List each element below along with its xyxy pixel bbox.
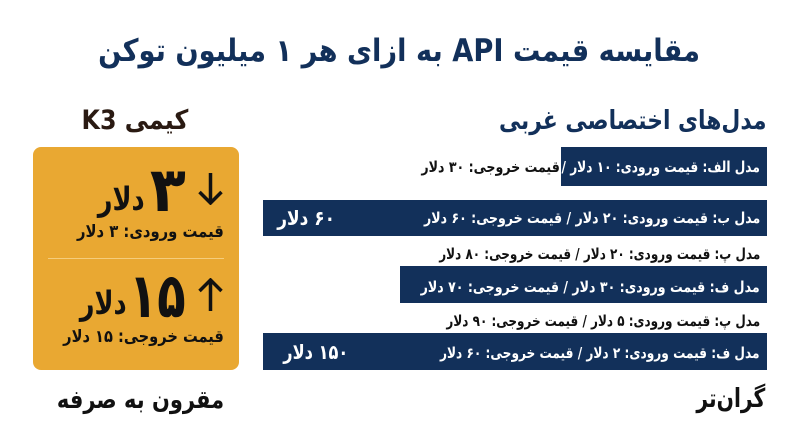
text: model F2: مدل ف: قیمت ورودی: ۲ دلار / قیمت خروجی: ۶۰ دلار — [440, 344, 760, 362]
text: model A off bar: قیمت خروجی: ۳۰ دلار — [422, 158, 560, 176]
icon: up arrow — [198, 278, 223, 311]
icon: down arrow — [198, 173, 223, 205]
bar: model F2 — [263, 333, 767, 370]
label: cost effective: مقرون به صرفه — [57, 385, 224, 414]
bar: model B — [263, 200, 767, 236]
value: model F2: ۱۵۰ دلار — [283, 340, 348, 364]
heading: Kimi K3: کیمی K3 — [81, 105, 188, 136]
panel: Kimi K3 pricing — [33, 147, 239, 370]
heading: western models: مدل‌های اختصاصی غربی — [498, 106, 766, 136]
label: more expensive: گران‌تر — [696, 384, 765, 414]
input price label: قیمت ورودی: ۳ دلار — [77, 222, 224, 242]
text: model B: مدل ب: قیمت ورودی: ۲۰ دلار / قیمت خروجی: ۶۰ دلار — [424, 209, 760, 227]
value: model B: ۶۰ دلار — [277, 206, 335, 230]
output price digits: ۱۵ — [129, 259, 186, 332]
input price unit: دلار — [98, 180, 145, 218]
title: مقایسه قیمت API به ازای هر ۱ میلیون توکن — [98, 33, 700, 69]
output price label: قیمت خروجی: ۱۵ دلار — [63, 327, 224, 347]
text: model F: مدل ف: قیمت ورودی: ۳۰ دلار / قیمت خروجی: ۷۰ دلار — [421, 278, 760, 296]
divider — [48, 258, 224, 259]
text: model A on bar: مدل الف: قیمت ورودی: ۱۰ دلار / — [562, 158, 760, 176]
output price unit: دلار — [80, 284, 127, 322]
text: model P: مدل پ: قیمت ورودی: ۲۰ دلار / قیمت خروجی: ۸۰ دلار — [439, 245, 760, 263]
bar: model F — [400, 266, 767, 303]
text: model P2: مدل پ: قیمت ورودی: ۵ دلار / قیمت خروجی: ۹۰ دلار — [446, 312, 760, 330]
bar: model A — [561, 147, 767, 186]
input price digit: ۳ — [150, 153, 186, 226]
